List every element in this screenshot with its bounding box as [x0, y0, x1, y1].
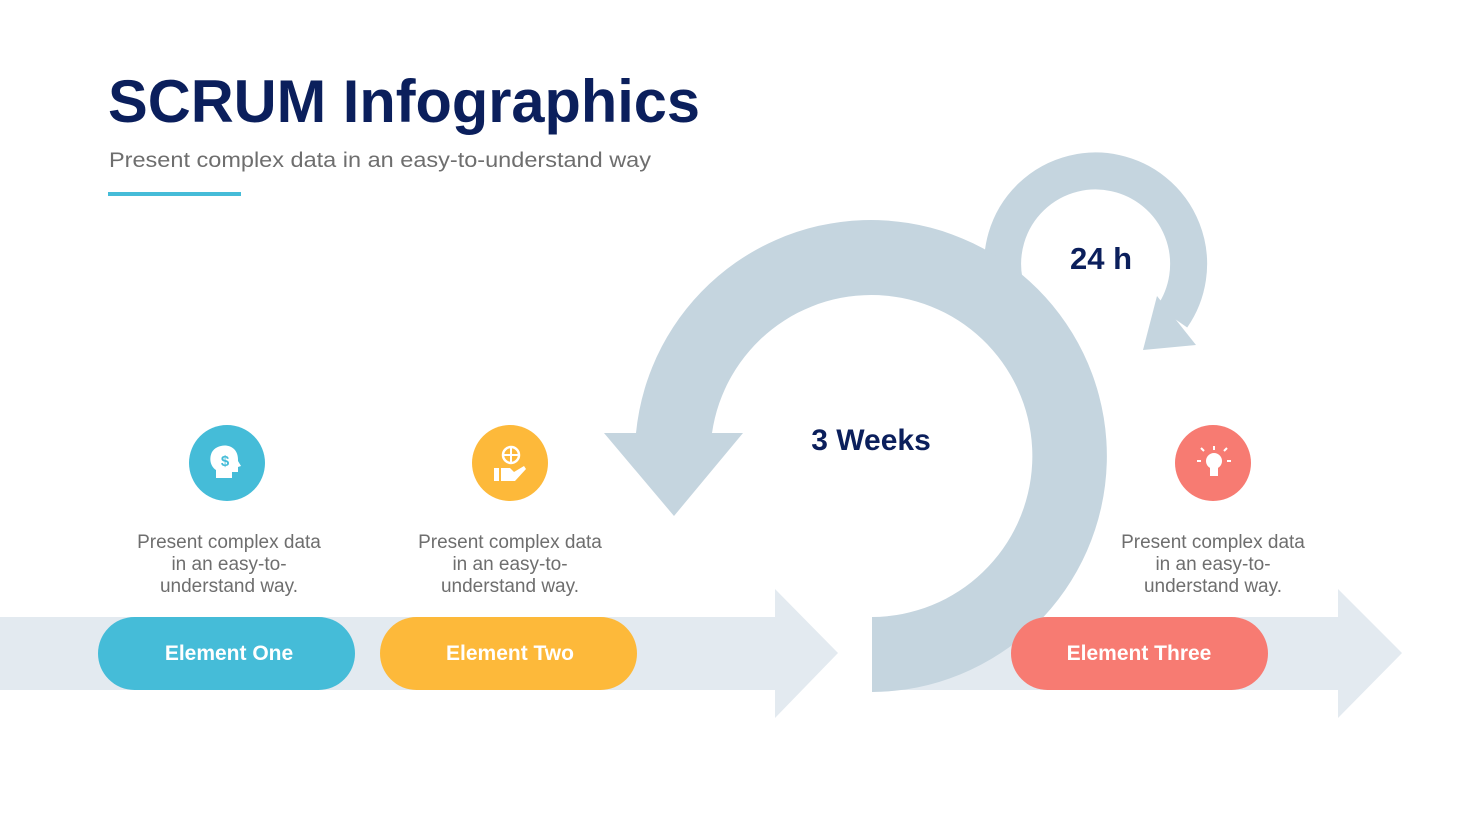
icon: light bulb — [1175, 425, 1251, 501]
text block: element two: Present complex data — [418, 532, 602, 553]
text block: element one: in an easy-to- — [171, 554, 287, 575]
text block: element three: in an easy-to- — [1155, 554, 1271, 575]
arrow: timeline right — [872, 589, 1402, 718]
text block: element three: Present complex data — [1121, 532, 1305, 553]
text block: element one — [137, 532, 321, 597]
title: SCRUM Infographics — [108, 68, 700, 135]
text block: element two: understand way. — [441, 576, 579, 597]
icon: head with dollar — [189, 425, 265, 501]
text block: element two: in an easy-to- — [452, 554, 568, 575]
pill: Element One: Element One — [165, 642, 293, 665]
text block: element one: Present complex data — [137, 532, 321, 553]
text block: element one: understand way. — [160, 576, 298, 597]
text block: element three — [1121, 532, 1305, 597]
subtitle: Present complex data in an easy-to-understand way — [109, 149, 652, 172]
icon: hand with globe — [472, 425, 548, 501]
label: 3 Weeks: 3 Weeks — [811, 424, 931, 457]
text block: element three: understand way. — [1144, 576, 1282, 597]
arrow: 3 weeks sprint loop — [604, 220, 1107, 692]
title underline — [108, 192, 241, 196]
pill: Element One — [98, 617, 355, 690]
arrow: timeline left — [0, 589, 838, 718]
arrow: 24h daily loop — [1003, 171, 1196, 350]
pill: Element Two: Element Two — [446, 642, 574, 665]
icon: head with dollar: $ — [221, 453, 230, 470]
label: 24 h: 24 h — [1070, 241, 1132, 276]
pill: Element Three — [1011, 617, 1268, 690]
text block: element two — [418, 532, 602, 597]
pill: Element Two — [380, 617, 637, 690]
pill: Element Three: Element Three — [1067, 642, 1211, 665]
